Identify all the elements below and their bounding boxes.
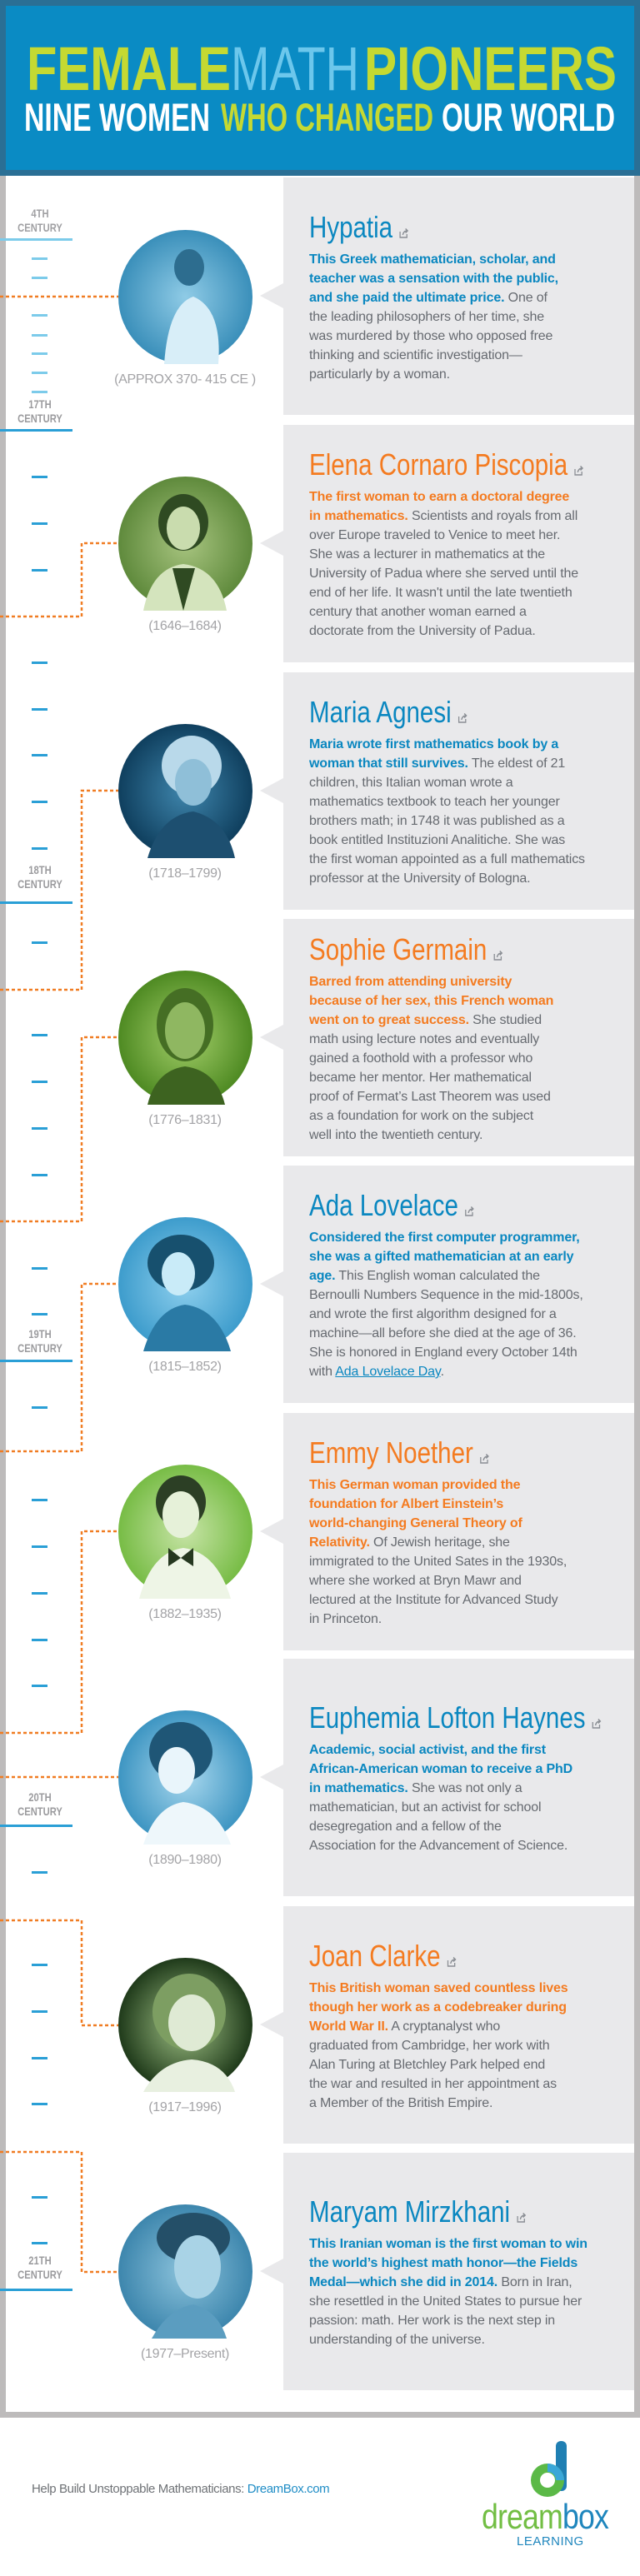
portrait: Elena: [118, 477, 252, 611]
panel: Emmy: world-changing General Theory of: [309, 1516, 522, 1530]
date: Maryam: (1977–Present): [141, 2347, 229, 2361]
panel: Elena: The first woman to earn a doctoral degree: [309, 490, 569, 504]
panel: Sophie: gained a foothold with a professor who: [309, 1051, 532, 1065]
panel: Joan: Alan Turing at Bletchley Park helped end: [309, 2058, 545, 2071]
panel: Euphemia: Association for the Advancement of Science.: [309, 1839, 568, 1853]
panel: Euphemia: Euphemia Lofton Haynes: [309, 1700, 585, 1735]
panel: Hypatia: Hypatia: [309, 210, 392, 243]
footer text: Help Build Unstoppable Mathematicians: DreamBox.com: [32, 2482, 329, 2496]
panel: Joan: the war and resulted in her appointment as: [309, 2076, 557, 2091]
panel: Joan: though her work as a codebreaker during: [309, 1999, 567, 2014]
panel: Ada: [283, 1166, 634, 1403]
panel: Maria: Maria Agnesi: [309, 695, 452, 729]
title: NINE WOMEN: [24, 95, 210, 139]
panel: Ada: with Ada Lovelace Day.: [309, 1365, 444, 1379]
panel: Maria: woman that still survives. The eldest of 21: [309, 756, 565, 771]
panel: Sophie: as a foundation for work on the subject: [309, 1108, 533, 1123]
panel: Elena: University of Padua where she served until the: [309, 567, 578, 581]
date: Sophie: (1776–1831): [148, 1113, 222, 1127]
panel: Joan: a Member of the British Empire.: [309, 2096, 492, 2109]
panel: Sophie: Barred from attending university: [309, 975, 512, 988]
timeline: CENTURY: [18, 877, 62, 891]
panel: Sophie: well into the twentieth century.: [309, 1128, 482, 1141]
panel: Elena: in mathematics. Scientists and royals from all: [309, 509, 578, 523]
portrait: Maryam: [118, 2204, 252, 2339]
panel: Euphemia: [283, 1659, 634, 1896]
date: Ada: (1815–1852): [148, 1360, 222, 1374]
panel: Maryam: Maryam Mirzkhani: [309, 2194, 510, 2229]
timeline: 21TH: [28, 2254, 52, 2267]
timeline: 18TH: [28, 863, 52, 876]
panel: Maria: professor at the University of Bologna.: [309, 871, 530, 886]
panel: Euphemia: in mathematics. She was not only a: [309, 1781, 522, 1795]
panel: Maryam: This Iranian woman is the first woman to win: [309, 2237, 588, 2251]
panel: Ada: she was a gifted mathematician at an early: [309, 1250, 573, 1264]
panel: Emmy: lectured at the Institute for Advanced Study: [309, 1593, 558, 1607]
date: Elena: (1646–1684): [148, 619, 222, 633]
panel: Ada: age. This English woman calculated the: [309, 1269, 540, 1283]
panel: Elena: doctorate from the University of Padua.: [309, 624, 536, 638]
portrait: Maria: [118, 724, 252, 858]
panel: Joan: This British woman saved countless lives: [309, 1981, 568, 1994]
panel: Hypatia: particularly by a woman.: [309, 367, 450, 382]
panel: Hypatia: and she paid the ultimate price. One of: [309, 290, 548, 305]
panel: Hypatia: thinking and scientific investigation—: [309, 348, 522, 362]
panel: Euphemia: desegregation and a fellow of the: [309, 1820, 502, 1834]
panel: Ada: Bernoulli Numbers Sequence in the mid-1800s,: [309, 1288, 583, 1302]
panel: Elena: over Europe traveled to Venice to meet her.: [309, 528, 560, 542]
panel: Ada: Considered the first computer programmer,: [309, 1231, 580, 1245]
panel: Emmy: where she worked at Bryn Mawr and: [309, 1574, 522, 1588]
panel: Emmy: immigrated to the United Sates in the 1930s,: [309, 1555, 567, 1569]
panel: Ada: machine—all before she died at the age of 36.: [309, 1326, 577, 1340]
date: Euphemia: (1890–1980): [148, 1853, 222, 1867]
panel: Hypatia: was murdered by those who opposed free: [309, 328, 552, 343]
panel: Maria: book entitled Instituzioni Analitiche. She was: [309, 833, 565, 847]
panel: Hypatia: teacher was a sensation with the public,: [309, 272, 558, 285]
panel: Maria: brothers math; in 1748 it was published as a: [309, 814, 564, 828]
panel: Sophie: went on to great success. She studied: [309, 1013, 542, 1026]
panel: Euphemia: Academic, social activist, and the first: [309, 1743, 546, 1757]
panel: Elena: [283, 425, 634, 662]
timeline: CENTURY: [18, 2268, 62, 2281]
timeline: 19TH: [28, 1327, 52, 1340]
panel: Emmy: [283, 1413, 634, 1650]
panel: Emmy: in Princeton.: [309, 1612, 382, 1626]
timeline: 17TH: [28, 397, 52, 411]
panel: Maryam: she resettled in the United States to pursue her: [309, 2294, 582, 2309]
panel: Sophie: proof of Fermat’s Last Theorem was used: [309, 1090, 551, 1103]
panel: Maryam: understanding of the universe.: [309, 2333, 485, 2347]
panel: Hypatia: This Greek mathematician, scholar, and: [309, 252, 556, 267]
panel: Ada: Ada Lovelace: [309, 1188, 458, 1222]
panel: Ada: She is honored in England every October 14th: [309, 1345, 578, 1360]
panel: Euphemia: African-American woman to receive a PhD: [309, 1762, 572, 1776]
portrait: Joan: [118, 1958, 252, 2092]
panel: Emmy: foundation for Albert Einstein’s: [309, 1497, 503, 1511]
icon: d mark: [531, 2441, 567, 2497]
timeline: CENTURY: [18, 412, 62, 425]
panel: Sophie: [283, 919, 634, 1156]
orange dotted connectors: [0, 295, 118, 2273]
title: WHO CHANGED: [221, 95, 433, 139]
panel: Ada: and wrote the first algorithm designed for a: [309, 1307, 557, 1321]
date: Joan: (1917–1996): [148, 2100, 222, 2114]
panel: Joan: World War II. A cryptanalyst who: [309, 2019, 500, 2033]
timeline: CENTURY: [18, 221, 62, 234]
date: Maria: (1718–1799): [148, 866, 222, 881]
panel: Maria: [283, 672, 634, 910]
panel: Sophie: math using lecture notes and eventually: [309, 1031, 539, 1046]
panel: Emmy: Relativity. Of Jewish heritage, she: [309, 1535, 510, 1550]
logo: dreambox learning: LEARNING: [517, 2534, 584, 2549]
panel: Emmy: This German woman provided the: [309, 1478, 520, 1492]
panel: Elena: She was a lecturer in mathematics at the: [309, 547, 545, 562]
panel: Hypatia: [283, 177, 634, 415]
logo: dreambox learning: [482, 2441, 608, 2549]
timeline: CENTURY: [18, 1805, 62, 1818]
panel: Maria: children, this Italian woman wrote a: [309, 776, 513, 790]
panel: Elena: century that another woman earned a: [309, 605, 527, 619]
panel: Maryam: Medal—which she did in 2014. Born in Iran,: [309, 2275, 572, 2289]
panel: Joan: graduated from Cambridge, her work with: [309, 2038, 550, 2053]
panel: Hypatia: the leading philosophers of her time, she: [309, 310, 544, 323]
portrait: Hypatia: [118, 230, 252, 364]
timeline: [0, 207, 72, 2291]
panel: Maria: mathematics textbook to teach her younger: [309, 795, 560, 809]
panel: Maria: the first woman appointed as a full mathematics: [309, 852, 585, 866]
title: FEMALE: [27, 34, 231, 103]
panel: Joan: Joan Clarke: [309, 1938, 441, 1973]
date: Emmy: (1882–1935): [148, 1607, 222, 1621]
timeline: 20TH: [28, 1790, 52, 1804]
panel: Sophie: Sophie Germain: [309, 931, 487, 966]
portrait: Ada: [118, 1217, 252, 1351]
header banner: [0, 0, 640, 176]
portrait: Euphemia: [118, 1710, 252, 1845]
timeline: CENTURY: [18, 1341, 62, 1355]
portrait: Emmy: [118, 1465, 252, 1599]
timeline: 4TH: [31, 207, 49, 220]
panel: Maryam: the world’s highest math honor—the Fields: [309, 2256, 578, 2270]
panel: Maryam: [283, 2153, 634, 2390]
panel: Joan: [283, 1906, 634, 2144]
panel: Euphemia: mathematician, but an activist for school: [309, 1800, 541, 1815]
panel: Elena: Elena Cornaro Piscopia: [309, 447, 568, 482]
title: [24, 34, 617, 139]
title: MATH: [231, 34, 359, 103]
panel: Elena: end of her life. It wasn't until the late twentieth: [309, 586, 572, 600]
panel: Sophie: because of her sex, this French woman: [309, 993, 553, 1008]
logo wordmark: dreambox: [482, 2497, 608, 2536]
panel: Maria: Maria wrote first mathematics book by a: [309, 737, 558, 751]
panel: Maryam: passion: math. Her work is the next step in: [309, 2314, 555, 2328]
panel: Sophie: became her mentor. Her mathematical: [309, 1070, 532, 1085]
date: Hypatia: (APPROX 370- 415 CE ): [114, 372, 256, 387]
portrait: Sophie: [118, 971, 252, 1105]
panel: Emmy: Emmy Noether: [309, 1435, 473, 1470]
